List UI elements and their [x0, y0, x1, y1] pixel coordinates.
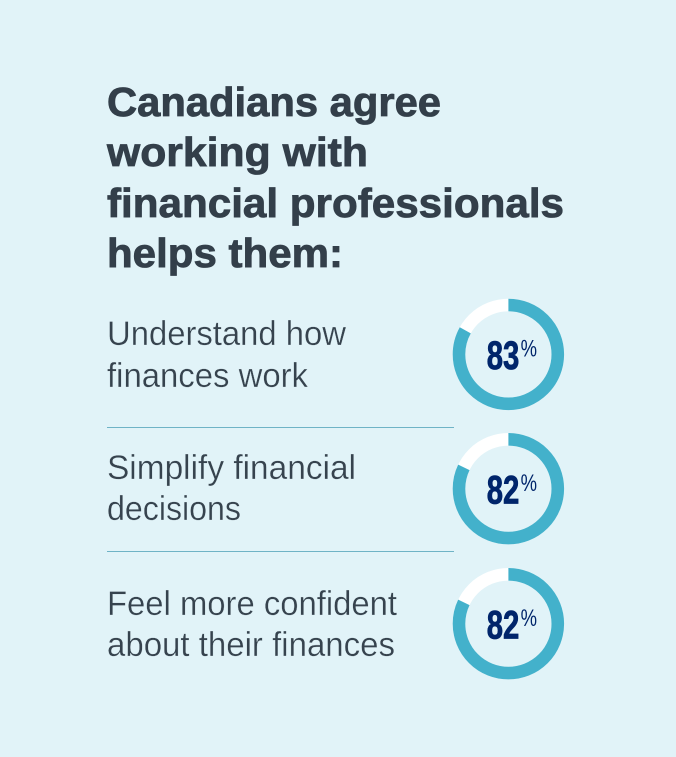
donut: 82 percent	[459, 574, 558, 673]
donut: 82 percent: %	[521, 605, 537, 632]
title: helps them:	[107, 230, 343, 276]
text: understand how finances work	[107, 315, 346, 395]
text: simplify financial decisions: decisions	[107, 490, 241, 528]
text: simplify financial decisions: Simplify financial	[107, 449, 356, 487]
text: simplify financial decisions	[107, 449, 356, 528]
donut: 83 percent: %	[521, 336, 537, 363]
donut: 82 percent: 82	[487, 468, 519, 512]
donut: 83 percent: 83	[487, 334, 519, 378]
title: financial professionals	[107, 180, 564, 226]
title: working with	[106, 129, 368, 175]
donut: 82 percent: 82	[487, 603, 519, 647]
donut: 82 percent: %	[521, 470, 537, 497]
title: Canadians agree	[107, 79, 441, 125]
text: understand how finances work: finances work	[107, 357, 309, 395]
text: feel more confident about their finances: about their finances	[107, 626, 395, 664]
text: understand how finances work: Understand how	[107, 315, 346, 353]
title	[106, 79, 564, 276]
donut: 83 percent	[459, 305, 558, 404]
donut: 82 percent	[459, 439, 558, 538]
text: feel more confident about their finances	[107, 585, 398, 664]
text: feel more confident about their finances: Feel more confident	[107, 585, 398, 623]
